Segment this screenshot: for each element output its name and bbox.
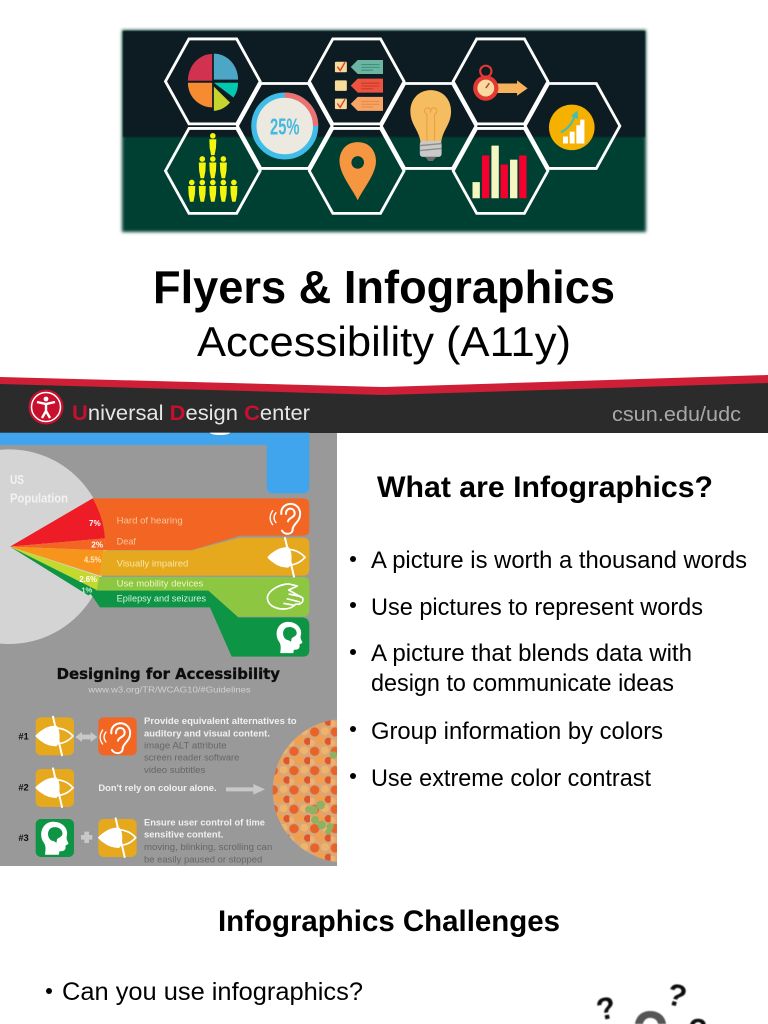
pie labels: 4.5% (84, 556, 101, 565)
item 3: be easily paused or stopped (144, 854, 262, 864)
icon: eye (268, 538, 305, 577)
icon: 25% ring (253, 94, 316, 158)
band labels: Visually impaired (117, 559, 188, 569)
item 1 (18, 716, 297, 775)
item 2 (18, 768, 265, 807)
guideline url: www.w3.org/TR/WCAG10/#Guidelines (87, 685, 251, 695)
icon: accessibility person logo (28, 390, 64, 424)
bullet 5: Use extreme color contrast (371, 765, 651, 792)
band labels (117, 516, 206, 604)
icon: map pin (339, 142, 376, 200)
subtitle: Accessibility (A11y) (197, 318, 571, 365)
pie labels: Population (10, 492, 68, 506)
band labels: Hard of hearing (117, 516, 183, 526)
bullet 3 (350, 640, 692, 697)
icon: checklist tags (335, 60, 383, 111)
icon: thinking head with question marks (593, 976, 707, 1024)
icon: color blindness plate (273, 719, 416, 862)
heading: what are infographics: What are Infographics? (377, 471, 713, 504)
icon: stopwatch arrow (473, 66, 528, 101)
band labels: Deaf (117, 537, 136, 547)
icon: growth circle (549, 105, 595, 150)
heading: infographics challenges: Infographics Challenges (218, 905, 560, 938)
item 2: Don't rely on colour alone. (98, 783, 217, 793)
item 3: #3 (18, 833, 29, 843)
bullet 2: Use pictures to represent words (371, 594, 703, 621)
item 3: sensitive content. (144, 830, 223, 840)
item 2: #2 (18, 783, 29, 793)
pie labels: 2.6% (79, 575, 97, 584)
icon: bar chart (472, 146, 527, 198)
item 1: video subtitles (144, 765, 206, 775)
population circle (0, 449, 106, 644)
bullet: can you use infographics: Can you use infographics? (62, 978, 363, 1006)
item 1: #1 (18, 731, 29, 741)
bullet 4: Group information by colors (371, 718, 663, 745)
bullet list (350, 547, 747, 792)
pie labels: 2% (91, 540, 103, 549)
title: Flyers & Infographics (153, 261, 615, 313)
bullet 3: A picture that blends data with (371, 640, 692, 667)
icon: ear (270, 504, 300, 534)
item 3: moving, blinking, scrolling can (144, 842, 272, 852)
logo wordmark: Universal Design Center (72, 402, 310, 425)
icon: head (277, 622, 302, 653)
yellow band (100, 538, 309, 576)
panel: accessibility infographic image (0, 432, 337, 866)
heading: designing for accessibility: Designing for Accessibility (57, 665, 280, 683)
pie labels (10, 473, 103, 595)
item 1: Provide equivalent alternatives to (144, 716, 297, 726)
band labels: Use mobility devices (117, 578, 204, 588)
band labels: Epilepsy and seizures (117, 594, 206, 604)
item 3 (18, 817, 272, 864)
orange band (93, 498, 309, 550)
item 1: auditory and visual content. (144, 728, 270, 738)
hexagon outlines (165, 39, 620, 213)
icon: light bulb (410, 90, 451, 161)
item 1: image ALT attribute (144, 740, 227, 750)
green band (88, 591, 309, 657)
banner: hexagon infographic icons (122, 30, 646, 232)
icon: 25% ring: 25% (270, 113, 299, 139)
pie labels: 1% (81, 586, 93, 595)
lime band (97, 577, 309, 617)
bullet 3: design to communicate ideas (371, 670, 674, 697)
item 1: screen reader software (144, 753, 239, 763)
pie labels: US (10, 473, 24, 487)
blue connector (0, 433, 309, 493)
pie labels: 7% (89, 519, 101, 528)
icon: pie chart (188, 54, 238, 111)
footer band: Universal Design Center (0, 375, 768, 433)
web address: csun.edu/udc (612, 404, 741, 426)
icon: hand (267, 584, 303, 609)
icon: people pyramid (188, 133, 237, 202)
icon: thinking head with question marks: ? (663, 976, 690, 1015)
item 3: Ensure user control of time (144, 817, 265, 827)
bullet 1: A picture is worth a thousand words (371, 547, 747, 574)
wedges (10, 498, 105, 547)
